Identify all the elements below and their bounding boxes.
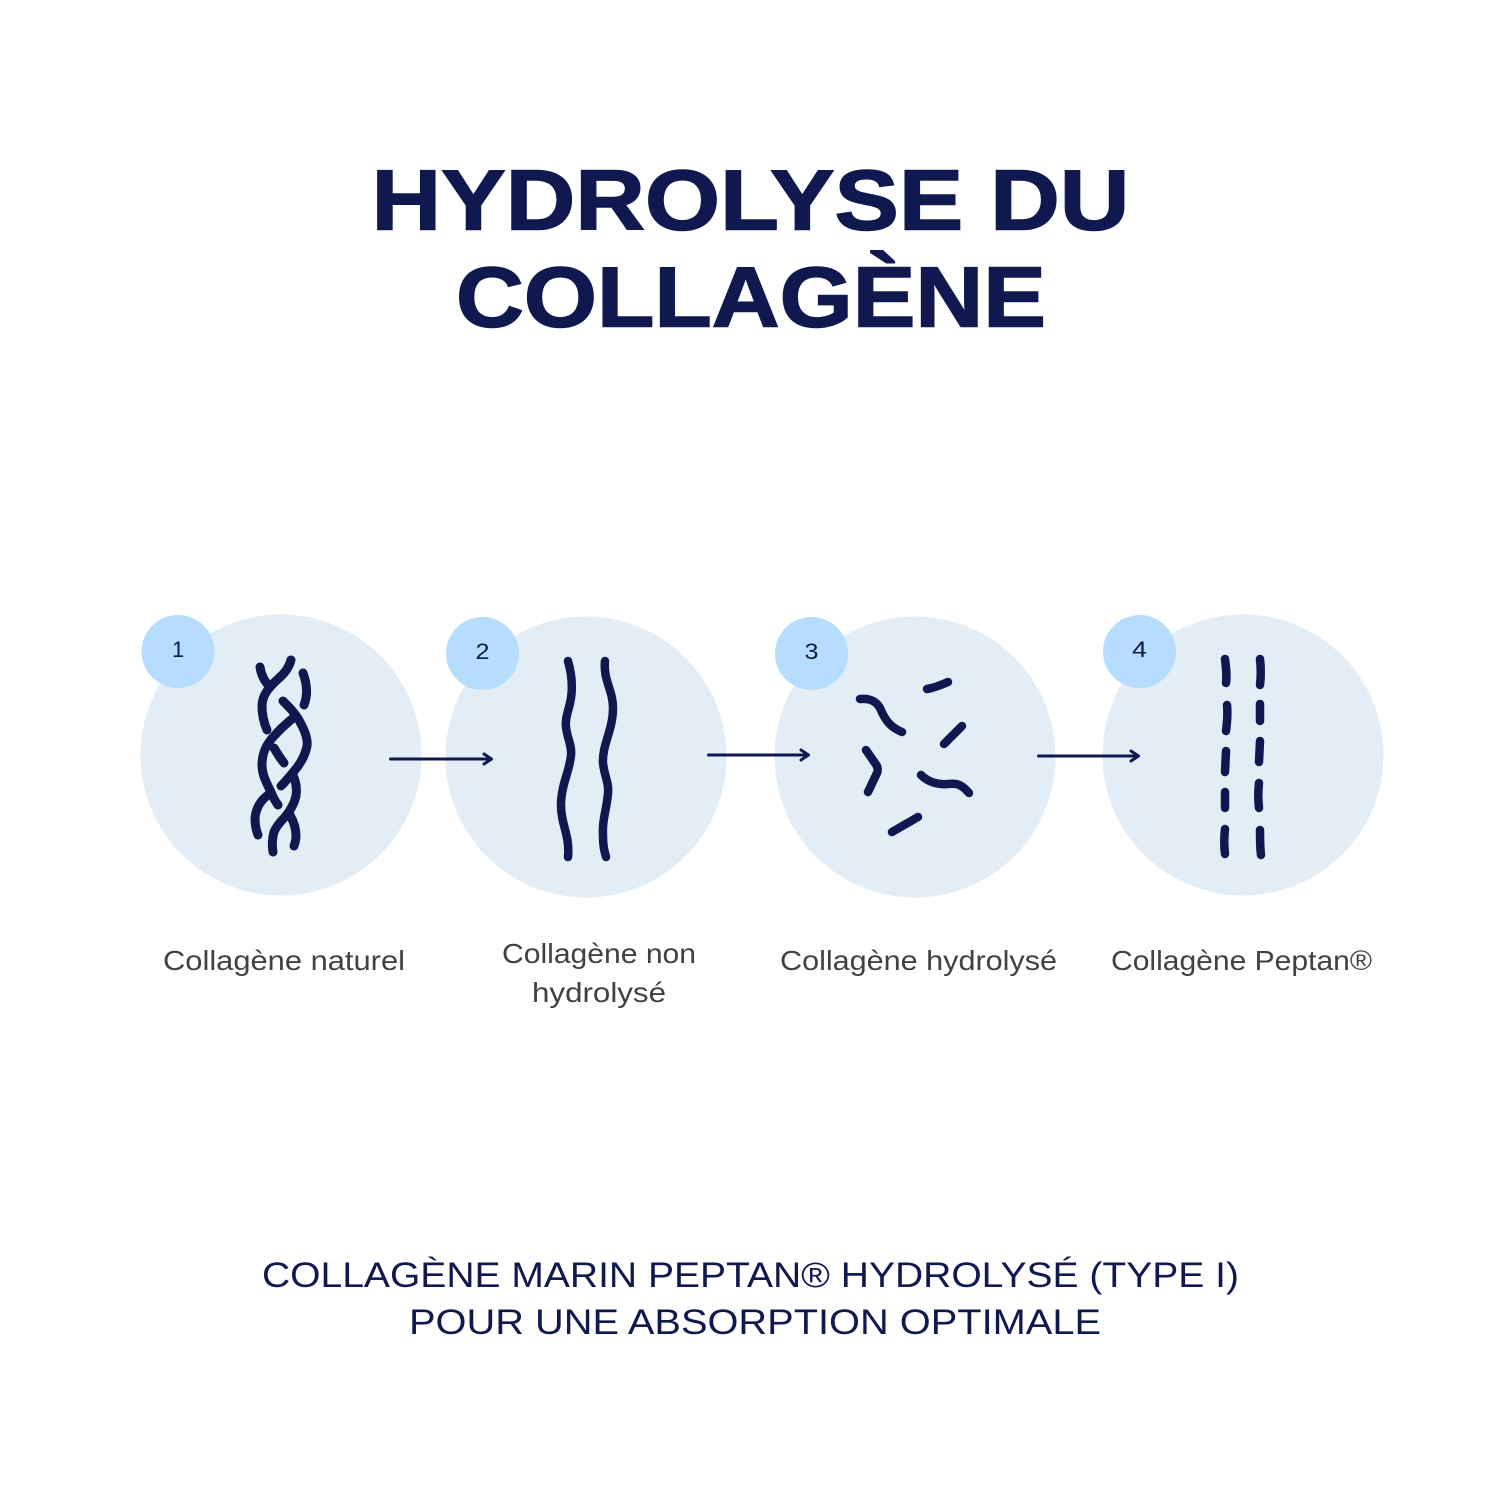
badge: number 1: 1: [172, 637, 184, 662]
badge: number 3: 3: [804, 639, 818, 664]
label: step 4: Collagène Peptan®: [1111, 945, 1372, 976]
label: step 3: Collagène hydrolysé: [780, 945, 1057, 976]
badge: number 1: [142, 615, 214, 688]
panel: step 4 Peptan collagen: [1102, 614, 1384, 896]
panel: step 3 hydrolysed collagen: [774, 616, 1056, 898]
conclusion text: COLLAGÈNE MARIN PEPTAN® HYDROLYSÉ (TYPE I): [262, 1256, 1239, 1295]
icon: braided collagen strands: [255, 660, 307, 852]
badge: number 3: [775, 617, 848, 690]
icon: two wavy strands: [561, 661, 613, 857]
label: step 1: Collagène naturel: [163, 945, 405, 976]
arrow: step 3 to 4: [1038, 751, 1138, 761]
conclusion text: [262, 1256, 1239, 1342]
arrow: step 2 to 3: [708, 750, 808, 760]
arrow: step 1 to 2: [390, 754, 492, 764]
label: step 2: Collagène non: [502, 938, 696, 969]
panel: step 1 natural collagen: [140, 614, 422, 896]
conclusion text: POUR UNE ABSORPTION OPTIMALE: [409, 1303, 1101, 1342]
icon: collagen fragments: [860, 682, 969, 832]
title: [372, 154, 1130, 346]
label: step 2: hydrolysé: [532, 977, 666, 1008]
badge: number 2: 2: [476, 639, 490, 664]
badge: number 2: [446, 617, 519, 690]
panel: step 2 non-hydrolysed collagen: [446, 616, 726, 898]
badge: number 4: 4: [1132, 637, 1147, 662]
badge: number 4: [1103, 615, 1176, 688]
icon: short dashed strands: [1224, 659, 1261, 855]
label: step 2: [502, 938, 696, 1008]
title: COLLAGÈNE: [456, 250, 1046, 346]
title: HYDROLYSE DU: [372, 154, 1130, 248]
